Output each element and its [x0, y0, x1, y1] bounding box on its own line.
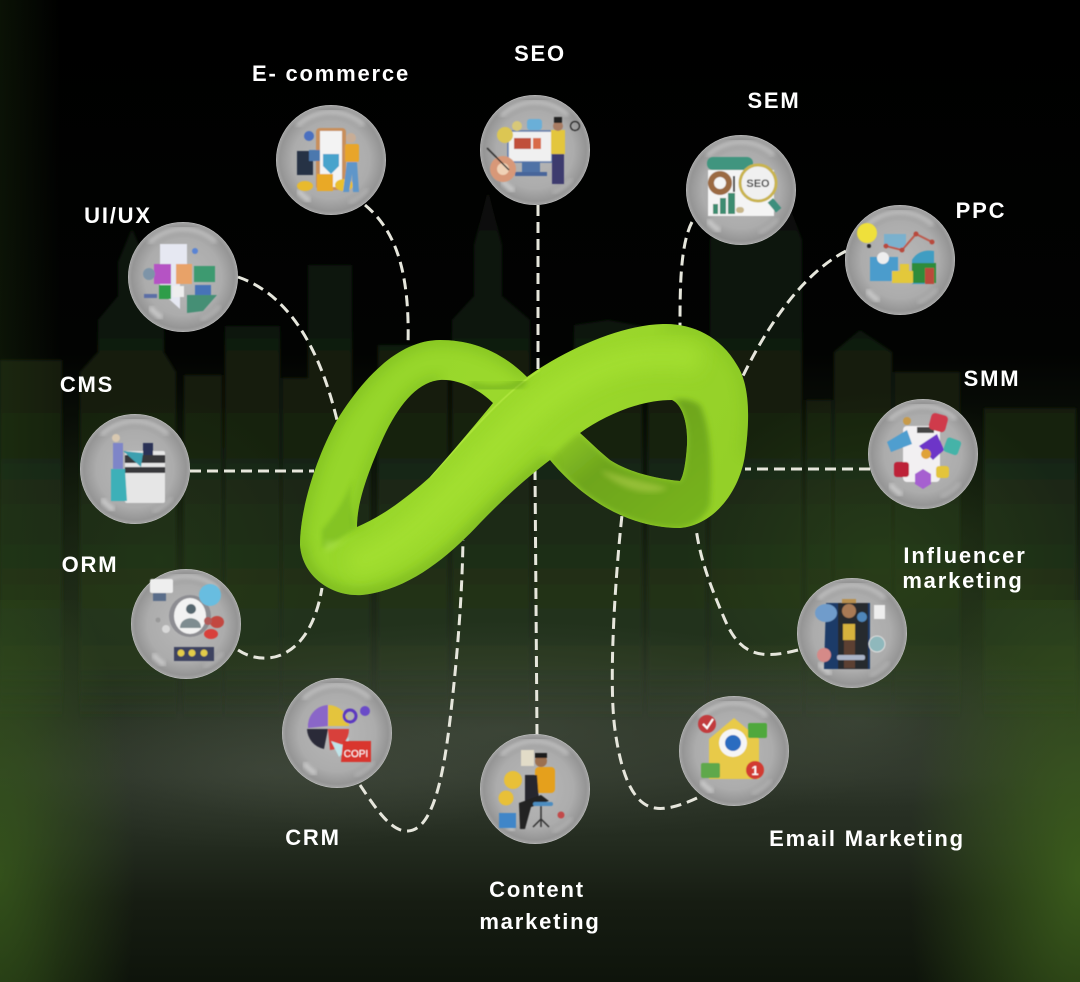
bubble: Influencer marketing: [797, 578, 907, 688]
label: Influencer marketing: Influencer: [903, 543, 1027, 568]
label: Email Marketing: Email Marketing: [769, 826, 965, 851]
label: Influencer marketing: marketing: [902, 568, 1024, 593]
connector: CMS: [190, 470, 314, 472]
bubble: Email Marketing: [679, 696, 789, 806]
label: UI/UX: UI/UX: [84, 203, 152, 228]
bubble: CRM: COPI: [344, 749, 368, 760]
label: ORM: ORM: [62, 552, 118, 577]
lower right inner shading: [550, 399, 711, 528]
shadow under crossing: [470, 382, 525, 389]
tube edge shading: [300, 460, 550, 595]
label: Content marketing: Content: [489, 877, 585, 902]
bubble: CRM: [282, 678, 392, 788]
front strip highlight: [350, 356, 700, 565]
connector: Email Marketing: [612, 515, 697, 809]
bubble: SEO: [480, 95, 590, 205]
label: E-commerce: E- commerce: [252, 61, 410, 86]
bubble: Email Marketing: 1: [751, 763, 759, 778]
infinity symbol: [300, 324, 748, 596]
bubble: PPC: [845, 205, 955, 315]
crease highlight: [430, 370, 540, 477]
connector: E-commerce: [365, 205, 408, 345]
connector: Content marketing: [535, 470, 537, 735]
bubble: SMM: [868, 399, 978, 509]
bubble: SEM: [686, 135, 796, 245]
label: SMM: SMM: [964, 366, 1020, 391]
connector: ORM: [238, 588, 322, 658]
connector: SEM: [680, 222, 692, 328]
bubble: ORM: [131, 569, 241, 679]
bubble: CMS: [80, 414, 190, 524]
bubble: Content marketing: [480, 734, 590, 844]
connector: Influencer marketing: [696, 528, 798, 655]
connector: SEO: [536, 205, 540, 375]
label: CMS: CMS: [60, 372, 114, 397]
bubble: UI/UX: [128, 222, 238, 332]
label: CRM: CRM: [285, 825, 341, 850]
label: PPC: PPC: [956, 198, 1006, 223]
left inner wall shading: [322, 490, 356, 546]
label: Content marketing: marketing: [479, 909, 601, 934]
connector: CRM: [360, 540, 463, 831]
connector: SMM: [745, 468, 870, 470]
city skyline silhouette: [0, 170, 1076, 720]
bubble: SEM: SEO: [746, 178, 770, 190]
connector: UI/UX: [238, 277, 337, 420]
bubble: E-commerce: [276, 105, 386, 215]
label: SEO: SEO: [514, 41, 566, 66]
connector: PPC: [741, 251, 846, 380]
label: SEM: SEM: [747, 88, 801, 113]
